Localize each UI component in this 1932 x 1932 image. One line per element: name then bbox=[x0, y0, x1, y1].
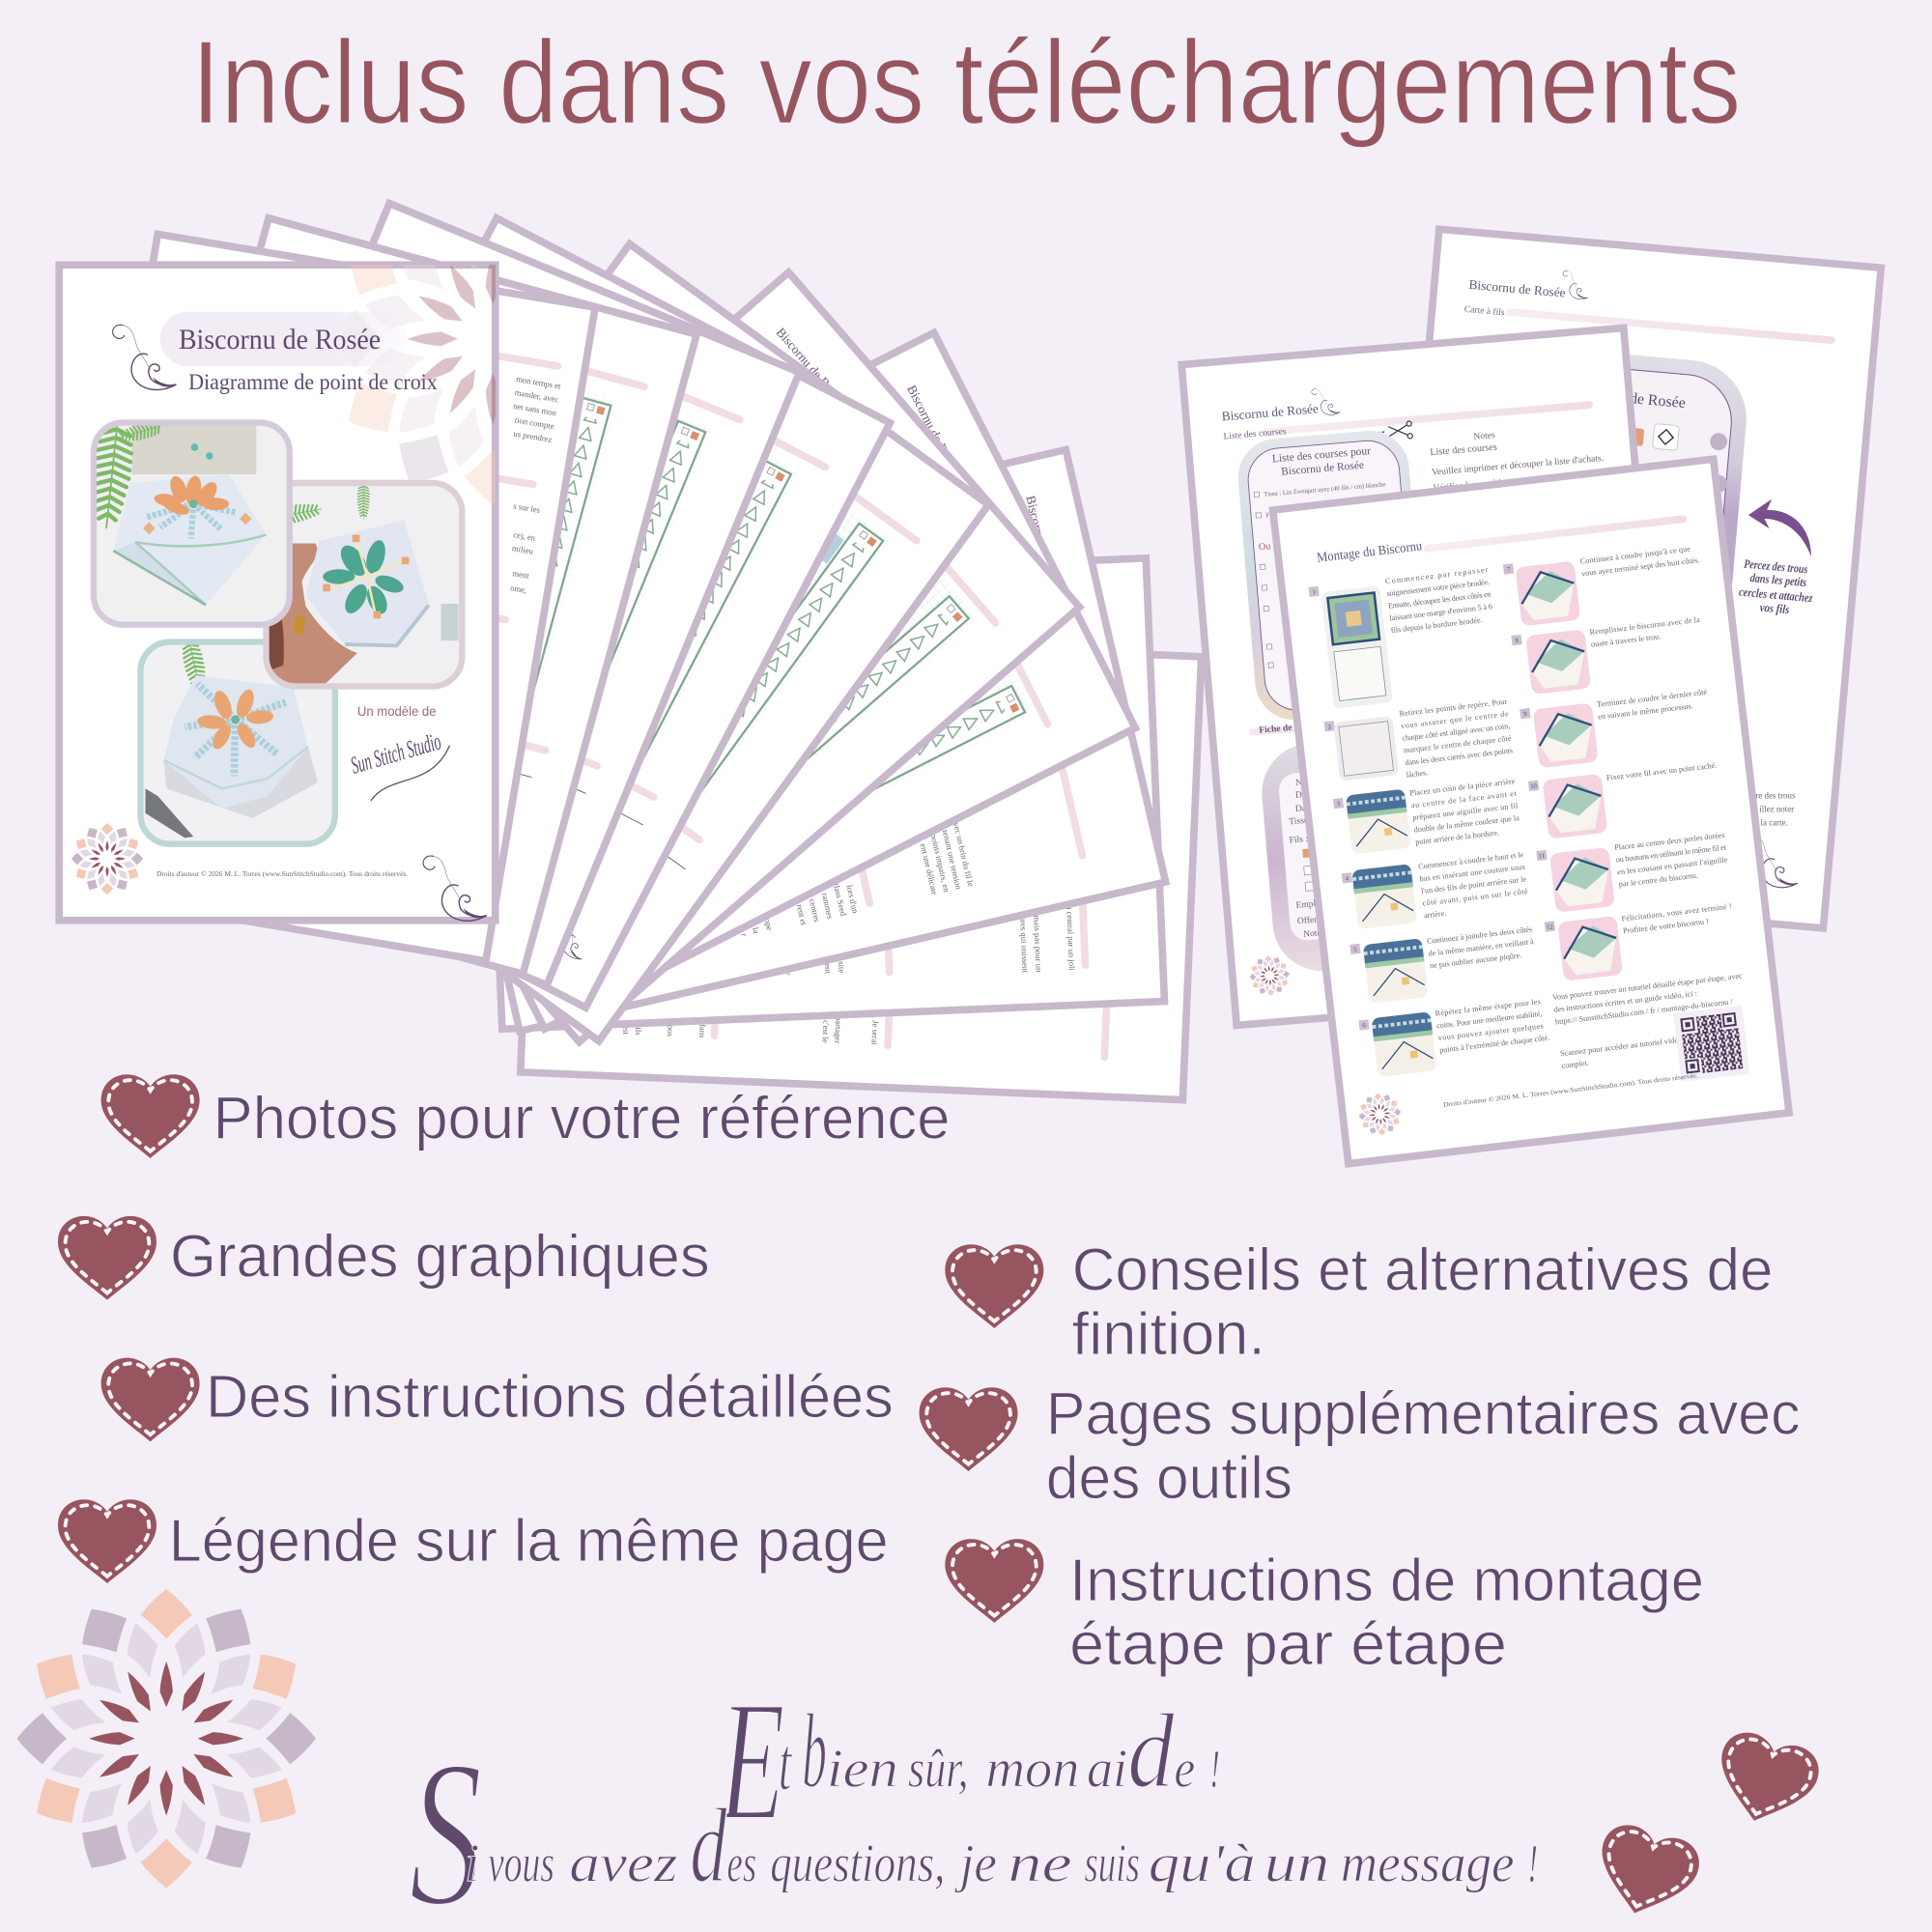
title: Inclus dans vos téléchargements bbox=[191, 16, 1741, 149]
bullet: photos: Photos pour votre référence bbox=[213, 1085, 950, 1152]
page 8: text page: rent et bbox=[795, 903, 809, 926]
step number badges: 10 bbox=[1530, 782, 1538, 790]
shopping list card bbox=[1236, 428, 1429, 724]
heart: legend bbox=[58, 1499, 156, 1583]
step text left column: laissant une marge d'environ 5 à 6 bbox=[1389, 602, 1492, 622]
page 10: text page: opos bbox=[666, 1020, 676, 1037]
shopping list card: Liste des courses pour bbox=[1272, 445, 1372, 466]
step text left column: Placez un coin de la pièce arrière bbox=[1409, 777, 1516, 798]
step text left column: arrière. bbox=[1424, 909, 1447, 920]
step number badges: 3 bbox=[1337, 801, 1341, 808]
tutorial note: Vous pouvez trouver un tutoriel détaillé étape par étape, avec bbox=[1552, 971, 1743, 1002]
icon: corner flourish bbox=[423, 856, 487, 921]
page 8: text page: tenant une tension bbox=[941, 829, 964, 891]
page 6: chart page bbox=[288, 272, 1080, 1042]
thread card page bbox=[1381, 229, 1881, 928]
thread card note text bbox=[1753, 791, 1796, 828]
step text left column: dans les deux carrés avec des points bbox=[1405, 746, 1513, 767]
copyright: Droits d'auteur © 2026 M. L. Torres (www.SunStitchStudio.com). Tous droits réservés. bbox=[156, 870, 408, 878]
script line: questions message: un bbox=[1264, 1834, 1329, 1894]
project sheet card: Offert bbox=[1296, 914, 1321, 926]
page 1: introduction text page: us prendrez bbox=[513, 428, 553, 444]
step number badges: 9 bbox=[1523, 711, 1528, 718]
small mandala bbox=[1248, 954, 1292, 997]
cover page bbox=[59, 173, 659, 921]
bullet: assembly: étape par étape bbox=[1069, 1610, 1507, 1678]
heart: decorative bottom right bbox=[1587, 1819, 1705, 1927]
bullet: finishing tips bbox=[1072, 1236, 1773, 1368]
project sheet card bbox=[1258, 736, 1417, 975]
page 9: text page: re bbox=[759, 970, 769, 977]
page 10: text page: est bbox=[621, 1025, 631, 1036]
page 6: chart page: Biscornu de Rosée bbox=[774, 325, 848, 408]
photo 1: biscornu with orange flower and pins bbox=[90, 419, 290, 625]
script line: questions message: vous bbox=[488, 1834, 554, 1894]
shopping list page: Biscornu de Rosée bbox=[1221, 401, 1319, 423]
step text left column: l'un des fils de point arrière sur le bbox=[1421, 874, 1527, 895]
step text left column: marquez le centre de chaque côté bbox=[1403, 734, 1512, 754]
step text left column: double de la même couleur que la bbox=[1413, 813, 1520, 835]
thread card page: Biscornu de Rosée bbox=[1468, 277, 1566, 300]
copyright: Droits d'auteur © 2026 M. L. Torres (www.SunStitchStudio.com). Tous droits réservés. bbox=[1443, 1072, 1698, 1109]
tutorial note: https:// SunstitchStudio.com / fr / montage-du-biscornu / bbox=[1555, 997, 1734, 1026]
page 1: introduction text page bbox=[48, 234, 595, 961]
script line: and of course my help: aide bbox=[1087, 1691, 1195, 1809]
script line: questions message: questions, bbox=[770, 1834, 945, 1894]
step text left column: Répétez la même étape pour les bbox=[1435, 997, 1541, 1018]
section label: Fiche de p bbox=[1259, 722, 1300, 736]
page 7: chart page: Biscornu de Rosée bbox=[904, 383, 961, 475]
step text left column: Retirez les points de repère. Pour bbox=[1399, 697, 1508, 718]
callout: pierce holes bbox=[1739, 557, 1813, 616]
tutorial note: Scannez pour accéder au tutoriel vidéo bbox=[1560, 1036, 1682, 1058]
script line: questions message: des bbox=[690, 1787, 756, 1905]
page 1: introduction text page: ce), en bbox=[513, 529, 537, 543]
step text right column bbox=[1579, 544, 1742, 935]
bullet: extra pages: Pages supplémentaires avec bbox=[1046, 1380, 1801, 1448]
step text left column: chaque côté est aligné avec un coin, bbox=[1402, 722, 1511, 743]
page 9: text page: mais pas pour un bbox=[1032, 915, 1044, 973]
photo 3: biscornu with scissors bbox=[140, 641, 335, 844]
flourish bbox=[1312, 387, 1340, 416]
step number badges: 12 bbox=[1547, 923, 1553, 931]
step photos bbox=[1318, 560, 1633, 1078]
page 8: text page: avec un brin du fil le bbox=[951, 817, 976, 888]
page 8: text page: la bbox=[751, 926, 761, 934]
page 4: chart page bbox=[192, 218, 890, 1008]
step text right column: par le centre du biscornu. bbox=[1618, 871, 1698, 889]
shopping list page: Liste des courses bbox=[1430, 442, 1497, 458]
page 2: chart page bbox=[95, 218, 696, 974]
script line: and of course my help: ! bbox=[1210, 1739, 1220, 1799]
step text left column: lâches. bbox=[1406, 768, 1429, 780]
page 10: text page: arils bbox=[634, 1020, 643, 1036]
step text left column: Commencez à coudre le haut et le bbox=[1418, 850, 1524, 871]
step text right column: Terminez de coudre le dernier côté bbox=[1596, 688, 1708, 709]
step text right column: Remplissez le biscornu avec de la bbox=[1589, 615, 1700, 637]
script line: and of course my help: t bbox=[779, 1721, 793, 1806]
step text right column: en suivant le même processus. bbox=[1598, 701, 1693, 722]
tutorial note bbox=[1552, 971, 1751, 1070]
script line: questions message: ! bbox=[1528, 1834, 1538, 1894]
step text right column: vous ayez terminé sept des huit côtés. bbox=[1581, 555, 1700, 578]
shopping list card: Fil bbox=[1265, 512, 1273, 519]
page 8: text page: rope bbox=[762, 915, 775, 931]
project sheet card: Not bbox=[1295, 777, 1310, 788]
thread card note text: illez noter bbox=[1759, 805, 1794, 814]
step text left column: côté avant, puis un sur le côté bbox=[1422, 887, 1528, 908]
step text right column: en les cousant en passant l'aiguille bbox=[1617, 855, 1728, 876]
thread card note text: ire des trous bbox=[1753, 791, 1796, 801]
page 1: introduction text page: ome, bbox=[509, 582, 527, 595]
script line: and of course my help: bien bbox=[802, 1691, 898, 1809]
page 5: chart page with blue motif bbox=[240, 244, 988, 1041]
heart: extra pages bbox=[920, 1387, 1018, 1471]
arrow: to thread card holes bbox=[1748, 499, 1811, 557]
fan of pattern pages bbox=[48, 203, 1202, 1100]
project sheet card: De bbox=[1295, 789, 1307, 801]
icon: flourish bbox=[113, 325, 176, 389]
step text left column: au centre de la face avant et bbox=[1410, 789, 1518, 810]
page 1: introduction text page: mander, avec bbox=[514, 387, 559, 404]
cover title pill bbox=[160, 312, 407, 366]
page 10: text page: dans bbox=[697, 1022, 708, 1038]
faded mandala on cover bbox=[349, 265, 496, 504]
background patch hiding page 1 corner bbox=[25, 788, 57, 912]
tutorial note: des instructions écrites et un guide vidéo, ici : bbox=[1553, 989, 1697, 1014]
step number badges: 4 bbox=[1345, 875, 1350, 883]
script line: and of course my help: E bbox=[720, 1666, 785, 1857]
heart: decorative top right bbox=[1707, 1726, 1825, 1834]
page 9: text page: un central par un joli bbox=[1065, 901, 1077, 972]
callout: pierce holes: Percez des trous bbox=[1744, 557, 1808, 576]
callout: pierce holes: dans les petits bbox=[1749, 571, 1807, 589]
page 10: text page: si c'est le bbox=[821, 1012, 832, 1043]
page 1: introduction text page: tion compte bbox=[514, 414, 555, 431]
step text left column: préparez une aiguille avec un fil bbox=[1412, 801, 1520, 822]
heart: instructions bbox=[101, 1358, 200, 1441]
bullet: charts: Grandes graphiques bbox=[170, 1222, 710, 1290]
tutorial note: complet. bbox=[1561, 1059, 1589, 1070]
shopping list page: Veuillez imprimer et découper la liste d'achats. bbox=[1432, 453, 1604, 478]
cover subtitle: Diagramme de point de croix bbox=[188, 370, 438, 394]
step text right column: ou boutons en utilisant le même fil et bbox=[1615, 842, 1727, 865]
script line: questions message: ne bbox=[1008, 1834, 1072, 1894]
shopping list page: Liste des courses bbox=[1223, 426, 1287, 442]
script line: questions message: avez bbox=[569, 1834, 678, 1894]
page 9: text page bbox=[484, 558, 1164, 1029]
page 10: text page bbox=[521, 629, 1202, 1100]
bullet: extra pages bbox=[1046, 1380, 1801, 1512]
step text left column: point arrière de la bordure. bbox=[1415, 828, 1499, 846]
shopping list card: Biscornu de Rosée bbox=[1281, 460, 1364, 478]
page 9: text page: on site bbox=[837, 951, 846, 974]
step text left column: fils depuis la bordure brodée. bbox=[1390, 615, 1483, 635]
signature bbox=[348, 727, 450, 801]
bullet: instructions: Des instructions détaillées bbox=[206, 1363, 894, 1431]
signature: Sun Stitch Studio bbox=[348, 727, 444, 780]
section label bbox=[1249, 721, 1311, 737]
page 1: introduction text page: s sur les bbox=[513, 500, 541, 515]
shopping list page: Vérifiez les matériaux que vous possédez déjà et bbox=[1433, 469, 1612, 494]
heart: photos bbox=[101, 1074, 200, 1158]
shopping list card: Tissu : Lin Zweigart ayez (40 fils / cm) blanche bbox=[1264, 481, 1386, 498]
thread card note text: la carte. bbox=[1761, 818, 1788, 828]
cover title: Biscornu de Rosée bbox=[179, 325, 381, 355]
project sheet card: Fils : bbox=[1289, 834, 1308, 846]
script line: questions message: qu'à bbox=[1149, 1834, 1256, 1894]
page 8: text page: Biscornu de Rosée bbox=[1023, 495, 1059, 592]
page 9: text page: ment bbox=[823, 956, 833, 975]
step number badges: 7 bbox=[1507, 566, 1511, 574]
step text left column bbox=[1383, 564, 1550, 1055]
small mandala bbox=[71, 823, 143, 895]
step text right column: Profitez de votre biscornu ! bbox=[1623, 917, 1709, 935]
photo 2: hand holding biscornu with green flower bbox=[267, 483, 462, 686]
callout: pierce holes: vos fils bbox=[1759, 601, 1790, 616]
thread card shape bbox=[1464, 344, 1751, 808]
page 1: introduction text page: net sans mon bbox=[512, 401, 557, 417]
page 1: introduction text page: milieu bbox=[511, 543, 534, 556]
script line: and of course my help: sûr, bbox=[908, 1739, 969, 1799]
icon: scissors bbox=[1360, 421, 1412, 442]
heart: assembly bbox=[945, 1539, 1043, 1623]
shopping list page: Notes bbox=[1473, 430, 1495, 442]
bullet: extra pages: des outils bbox=[1046, 1444, 1293, 1512]
project sheet card: Emplac bbox=[1295, 897, 1324, 911]
step number badges: 11 bbox=[1538, 853, 1546, 860]
project sheet card: Da bbox=[1294, 803, 1307, 814]
step text left column: soigneusement votre pièce brodée. bbox=[1386, 578, 1490, 598]
script line: questions message: message bbox=[1341, 1834, 1515, 1894]
script line: and of course my help bbox=[718, 1666, 1220, 1857]
page 8: text page bbox=[420, 450, 1166, 1031]
page 8: text page: points impairs, en bbox=[929, 833, 952, 894]
page 9: text page: de bbox=[770, 968, 781, 976]
callout: pierce holes: cercles et attachez bbox=[1739, 585, 1813, 605]
script line: questions message: suis bbox=[1084, 1834, 1140, 1894]
flourish bbox=[1561, 270, 1590, 299]
step number badges bbox=[1308, 563, 1564, 1031]
step text left column: points à l'extrémité de chaque côté. bbox=[1439, 1034, 1550, 1055]
page 9: text page: tures qui unissent bbox=[1018, 914, 1031, 974]
step text left column: de la même manière, en veillant à bbox=[1428, 937, 1534, 958]
thread card page: Carte à fils bbox=[1463, 304, 1505, 318]
shopping list page bbox=[1181, 327, 1679, 1025]
step text right column: Continuez à coudre jusqu'à ce que bbox=[1579, 544, 1691, 566]
heart: finishing tips bbox=[945, 1244, 1043, 1328]
script line: questions message bbox=[409, 1718, 1538, 1932]
step text left column: ne pas oublier aucune piqûre. bbox=[1430, 951, 1522, 970]
step number badges: 5 bbox=[1353, 947, 1358, 953]
step text left column: vous assurer que le centre de bbox=[1401, 709, 1509, 730]
step text left column: coins. Pour une meilleure stabilité, bbox=[1436, 1009, 1543, 1030]
page 8: text page: glass Seed bbox=[831, 880, 849, 918]
page 9: text page: de bbox=[783, 967, 794, 976]
step number badges: 8 bbox=[1515, 638, 1520, 644]
QR code bbox=[1673, 1006, 1749, 1082]
page 7: chart page bbox=[343, 332, 1135, 1029]
bullet: legend: Légende sur la même page bbox=[169, 1507, 889, 1575]
step text right column: ouate à travers le trou. bbox=[1590, 632, 1662, 649]
step text right column: Fixez votre fil avec un point caché. bbox=[1605, 761, 1718, 782]
step number badges: 1 bbox=[1312, 589, 1316, 596]
page 8: text page: r bbox=[739, 932, 750, 937]
page 3: chart page bbox=[137, 203, 800, 985]
step text left column: vous pouvez ajouter quelques bbox=[1437, 1021, 1544, 1042]
project sheet card: Notes bbox=[1303, 927, 1325, 940]
script line: and of course my help: mon bbox=[985, 1739, 1079, 1799]
page 8: text page: rammes bbox=[820, 892, 836, 921]
script line: questions message: i bbox=[465, 1834, 479, 1894]
page 10: text page: x partager bbox=[833, 1009, 844, 1044]
step text left column: Commencez par repasser bbox=[1384, 565, 1489, 585]
thread card shape: de Rosée bbox=[1629, 390, 1687, 412]
step text left column: Ensuite, découpez les deux côtés en bbox=[1387, 590, 1492, 611]
project sheet card: Tissu bbox=[1289, 815, 1309, 827]
small mandala bbox=[1356, 1091, 1404, 1138]
page heading: Montage du Biscornu bbox=[1316, 538, 1423, 566]
designer credit: Un modèle de bbox=[357, 704, 437, 719]
page 8: text page: centres bbox=[808, 897, 822, 923]
bullet: finishing tips: finition. bbox=[1072, 1300, 1265, 1368]
step text left column: bas en insérant une couture sous bbox=[1419, 863, 1525, 883]
shopping list card: Ou bbox=[1259, 541, 1271, 553]
page 8: text page: ile. bbox=[902, 829, 915, 841]
step number badges: 2 bbox=[1327, 724, 1331, 730]
step number badges: 6 bbox=[1362, 1022, 1367, 1030]
step text right column: Placez au centre deux perles dorées bbox=[1614, 831, 1725, 852]
page 8: text page: lors d'un bbox=[844, 884, 861, 915]
step text left column: Continuez à joindre les deux côtés bbox=[1427, 924, 1533, 946]
page 1: introduction text page: mon temps et bbox=[516, 374, 562, 391]
bullet: assembly bbox=[1069, 1547, 1704, 1678]
assembly instructions page bbox=[1273, 459, 1789, 1164]
page 8: text page: ent une délicate bbox=[919, 842, 940, 895]
icon: thread page flourish bbox=[1747, 836, 1798, 888]
step text right column: Félicitations, vous avez terminé ! bbox=[1621, 901, 1732, 923]
page 1: introduction text page: ment bbox=[512, 568, 530, 581]
large mandala bbox=[16, 1589, 316, 1889]
page 10: text page: n. Je serai bbox=[869, 1011, 881, 1046]
bullet: assembly: Instructions de montage bbox=[1069, 1547, 1704, 1614]
script line: questions message: je bbox=[954, 1834, 997, 1894]
heart: charts bbox=[58, 1216, 156, 1300]
bullet: finishing tips: Conseils et alternatives de bbox=[1072, 1236, 1773, 1303]
